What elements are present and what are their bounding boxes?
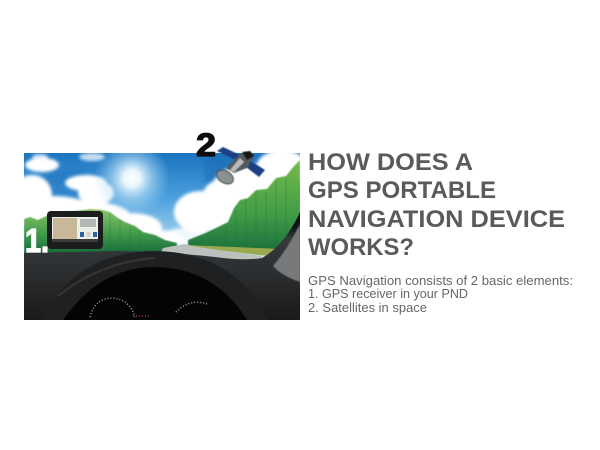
right tree line: [188, 160, 300, 252]
clouds: [24, 153, 300, 246]
text block: GPS elements description: [308, 273, 573, 315]
title: GPS PORTABLE: [308, 177, 496, 204]
solar panel right: [246, 161, 265, 177]
tree trunks texture: [110, 178, 286, 242]
sky: [24, 153, 300, 263]
satellite dish: [214, 167, 236, 187]
title: [308, 149, 565, 261]
satellite body: [226, 151, 254, 173]
label: number 2: 2: [196, 127, 216, 163]
label: number 1: 1.: [25, 222, 49, 259]
dashboard: [24, 212, 300, 320]
sun: [96, 153, 168, 212]
panel: windshield photo scene: [24, 153, 300, 320]
solar panel left: [217, 147, 242, 161]
instrument cluster: [90, 298, 207, 317]
icon: GPS navigation device: [47, 211, 103, 249]
device screen buttons: [80, 219, 97, 237]
text block: GPS elements description: 1. GPS receiver in your PND: [308, 286, 468, 301]
icon: satellite: [214, 147, 265, 187]
text block: GPS elements description: GPS Navigation consists of 2 basic elements:: [308, 273, 573, 288]
A-pillar: [273, 224, 300, 282]
left tree line: [24, 209, 177, 254]
title: WORKS?: [308, 234, 414, 261]
roadside grass: [186, 245, 282, 256]
road: [161, 244, 262, 260]
text block: GPS elements description: 2. Satellites in space: [308, 300, 427, 315]
device screen map: [53, 218, 77, 239]
title: HOW DOES A: [308, 149, 473, 176]
title: NAVIGATION DEVICE: [308, 206, 565, 233]
steering wheel: [58, 251, 247, 320]
